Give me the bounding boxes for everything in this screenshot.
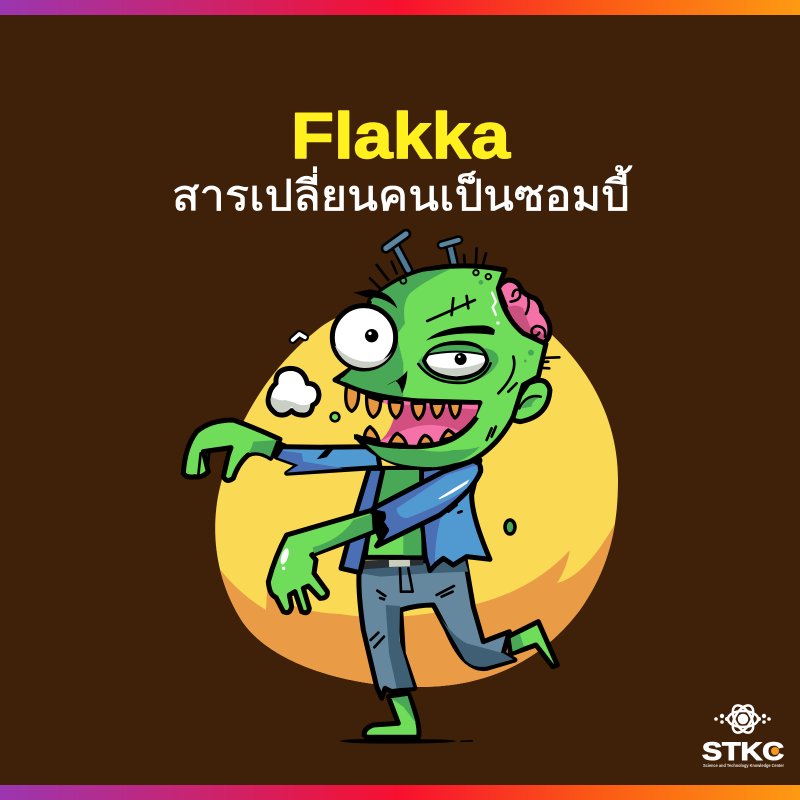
near sleeve: [373, 461, 481, 546]
eye socket: [418, 348, 498, 383]
bottom gradient bar: [0, 785, 800, 800]
caret mark: [293, 334, 305, 340]
big eye: [332, 306, 396, 369]
left eyebrow: [353, 289, 397, 308]
tongue: [380, 425, 463, 447]
left jacket panel: [341, 468, 383, 573]
yellow moon backdrop: [215, 318, 618, 687]
ground shadow: [340, 739, 473, 744]
STKC wordmark: STKC: [702, 738, 784, 766]
right jacket panel: [422, 460, 490, 571]
upper teeth: [346, 386, 461, 419]
green skin spots: [479, 280, 483, 285]
torn marks: [448, 505, 462, 513]
far arm and hand: [183, 420, 280, 480]
mouth interior: [378, 402, 478, 447]
small eye: [418, 343, 491, 383]
sleeve highlight: [438, 479, 469, 499]
fly: [400, 568, 413, 592]
brain: [498, 280, 550, 343]
nose: [386, 371, 407, 393]
belt buckle: [389, 559, 410, 567]
scar: [427, 296, 475, 321]
top gradient bar: [0, 0, 800, 15]
trouser creases: [371, 586, 454, 647]
mouth outline: [333, 379, 481, 449]
STKC logo: [702, 702, 784, 768]
forehead highlight: [492, 293, 496, 315]
gums: [383, 400, 478, 409]
front foot: [364, 693, 419, 737]
head warts: [400, 270, 491, 284]
puff of smoke: [268, 334, 339, 421]
trouser shading: [362, 561, 513, 688]
cheek creases: [487, 357, 517, 440]
lower teeth: [364, 427, 457, 445]
emblem dots: [714, 714, 771, 724]
zombie upper body and head: [183, 234, 559, 480]
near arm and hand: [268, 510, 374, 613]
face shading: [340, 268, 452, 398]
hair stubble: [370, 248, 559, 368]
bolts: [386, 234, 459, 270]
logo tagline: Science and Technology Knowledge Center: [703, 763, 784, 768]
small floating green dot: [505, 520, 515, 534]
back foot: [508, 622, 557, 667]
hand highlight: [279, 547, 290, 565]
logo orange dot: [771, 747, 779, 755]
far cuff: [270, 440, 287, 459]
belt: [363, 558, 423, 569]
ear: [507, 380, 550, 422]
title: Flakka: Flakka: [291, 99, 511, 172]
zombie lower body: [268, 460, 557, 744]
atom emblem: [728, 702, 758, 736]
right eyebrow: [426, 325, 495, 341]
far sleeve: [275, 447, 380, 473]
trousers: [359, 558, 515, 698]
torn cuff: [374, 509, 387, 540]
head: [335, 266, 546, 468]
jaw shading: [363, 441, 480, 467]
subtitle in Thai: สารเปลี่ยนคนเป็นซอมบี้: [172, 165, 633, 219]
shirt: [365, 468, 423, 557]
